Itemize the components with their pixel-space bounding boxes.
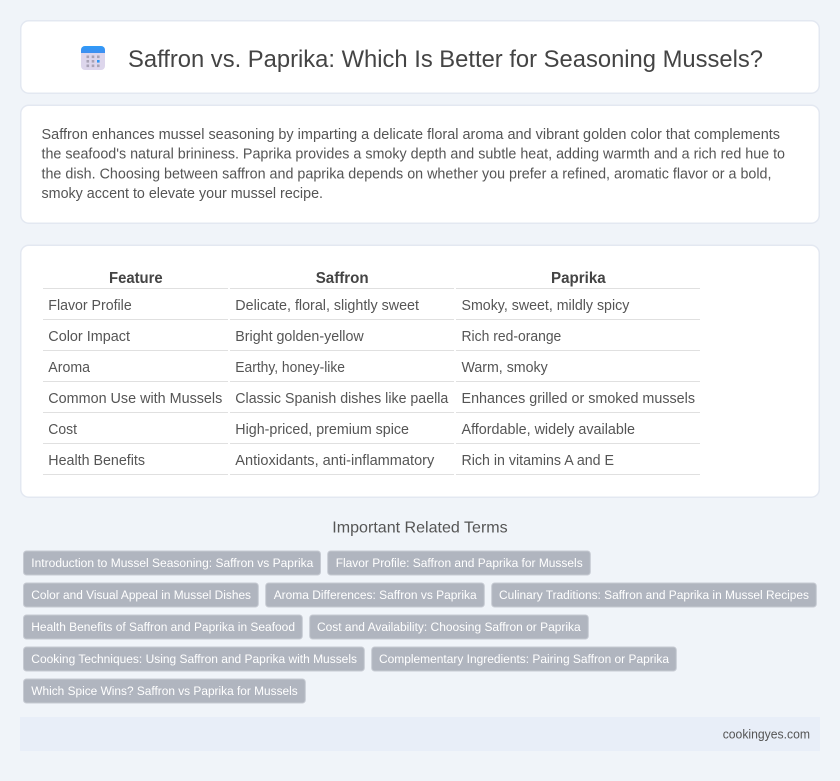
footer source text: cookingyes.com xyxy=(723,727,810,741)
table row: cost: Affordable, widely available xyxy=(462,422,635,438)
table row: flavor profile: Flavor Profile xyxy=(48,298,132,314)
table row: aroma: Earthy, honey-like xyxy=(235,360,345,376)
table row: flavor profile: Delicate, floral, slightly sweet xyxy=(235,298,419,314)
tag: Aroma Differences: Saffron vs Paprika xyxy=(274,588,477,602)
tag: Which Spice Wins? Saffron vs Paprika for Mussels xyxy=(31,684,298,698)
table header row: Saffron xyxy=(316,270,369,287)
table row: health benefits: Health Benefits xyxy=(48,453,145,469)
table row: health benefits: Antioxidants, anti-inflammatory xyxy=(235,453,435,469)
tag xyxy=(328,551,590,575)
panel: title header xyxy=(21,21,819,93)
table row: color impact: Bright golden-yellow xyxy=(235,329,364,345)
heading: important related terms: Important Related Terms xyxy=(332,520,508,537)
table header row: Feature xyxy=(109,270,163,287)
table header row xyxy=(43,270,700,289)
text block: summary: the seafood's natural brininess. Paprika provides a smoky depth and subtle heat, adding warmth and a rich red hue to xyxy=(42,147,785,163)
tag: Health Benefits of Saffron and Paprika in Seafood xyxy=(31,620,295,634)
tag xyxy=(372,647,676,671)
tag xyxy=(310,615,588,639)
table row: aroma xyxy=(43,360,700,382)
tag: Cooking Techniques: Using Saffron and Paprika with Mussels xyxy=(31,652,357,666)
table row: health benefits xyxy=(43,453,700,475)
table row: color impact: Color Impact xyxy=(48,329,130,345)
panel: summary paragraph xyxy=(21,105,819,223)
table row: aroma: Warm, smoky xyxy=(462,360,548,376)
table row: health benefits: Rich in vitamins A and E xyxy=(462,453,614,469)
tag xyxy=(266,583,484,607)
panel: comparison table xyxy=(21,245,819,497)
text block: summary: Saffron enhances mussel seasoning by imparting a delicate floral aroma and vibrant golden color that complements xyxy=(42,127,780,143)
tag xyxy=(24,615,302,639)
table row: common use with mussels: Common Use with Mussels xyxy=(48,391,222,407)
table row: cost: Cost xyxy=(48,422,77,438)
table row: flavor profile xyxy=(43,298,700,320)
title: Saffron vs. Paprika: Which Is Better for Seasoning Mussels? xyxy=(128,46,763,73)
tag: Color and Visual Appeal in Mussel Dishes xyxy=(31,588,251,602)
table row: cost xyxy=(43,422,700,444)
table row: common use with mussels: Enhances grilled or smoked mussels xyxy=(462,391,695,407)
table row: common use with mussels xyxy=(43,391,700,413)
tag list: related terms xyxy=(24,551,816,703)
footer xyxy=(20,717,820,751)
table header row: Paprika xyxy=(551,270,606,287)
table row: flavor profile: Smoky, sweet, mildly spicy xyxy=(462,298,630,314)
tag: Complementary Ingredients: Pairing Saffron or Paprika xyxy=(379,652,669,666)
tag xyxy=(492,583,816,607)
table row: color impact: Rich red-orange xyxy=(462,329,561,345)
tag: Culinary Traditions: Saffron and Paprika in Mussel Recipes xyxy=(499,588,809,602)
icon: calendar xyxy=(81,46,105,70)
text block: summary: the dish. Choosing between saffron and paprika depends on whether you prefer a refined, aromatic flavor or a bold, xyxy=(42,166,772,182)
tag xyxy=(24,647,364,671)
table row: aroma: Aroma xyxy=(48,360,90,376)
tag: Introduction to Mussel Seasoning: Saffron vs Paprika xyxy=(31,556,313,570)
table row: common use with mussels: Classic Spanish dishes like paella xyxy=(235,391,448,407)
tag xyxy=(24,583,258,607)
table row: color impact xyxy=(43,329,700,351)
tag: Cost and Availability: Choosing Saffron or Paprika xyxy=(317,620,581,634)
text block: summary: smoky accent to elevate your mussel recipe. xyxy=(42,186,323,202)
tag: Flavor Profile: Saffron and Paprika for Mussels xyxy=(336,556,583,570)
table row: cost: High-priced, premium spice xyxy=(235,422,409,438)
tag xyxy=(24,679,305,703)
tag xyxy=(24,551,320,575)
text block: summary xyxy=(42,127,785,202)
